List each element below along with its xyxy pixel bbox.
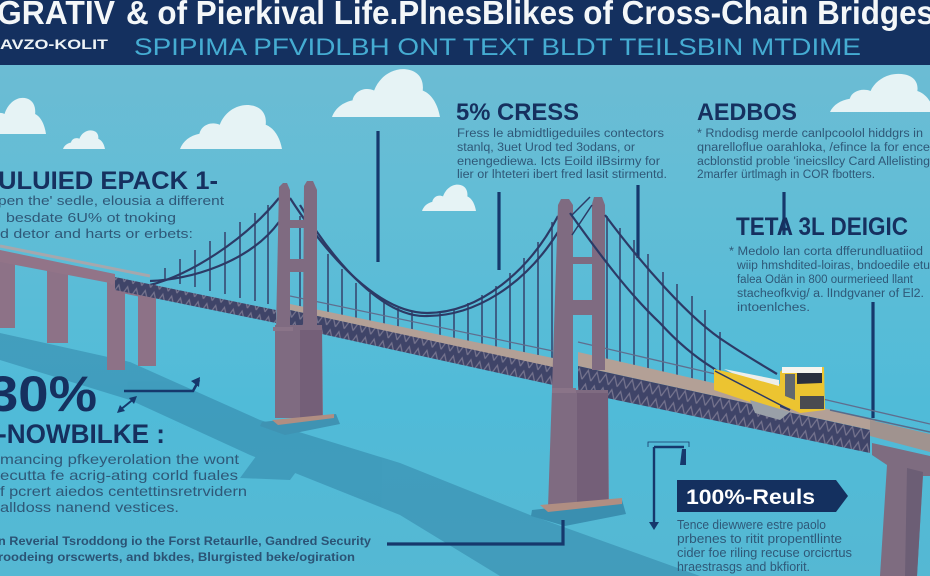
body text: Fress le abmidtligeduiles contectors [457,128,664,140]
right deck [578,342,930,453]
body text: wiip hmshdited-loiras, bndoedile etu [736,260,930,272]
body text: falea Odän in 800 ourmerieed llant [737,274,914,286]
connector to tower base [387,520,563,544]
tower 1 base [260,414,340,435]
right approach pier [830,410,930,576]
arrow to 100% panel [648,442,689,530]
heading: TETA 3L DEIGIC [736,213,908,241]
cab windows [797,373,822,384]
left approach piers [0,258,156,370]
body text [697,128,930,181]
panel: 100% [677,480,852,574]
cloud 5 [422,185,476,211]
body text [457,128,667,181]
tower 2 base [531,498,626,526]
panel: aedbos [697,99,930,181]
cloud 2 [180,105,282,149]
panel: 5% cress [456,99,667,181]
body text: acblonstid proble 'ineicsllcy Card Allelisting [697,156,930,168]
tower 1 [273,181,323,418]
subtitle: SPIPIMA PFVIDLBH ONT TEXT BLDT TEILSBIN MTDIME [134,34,861,61]
center deck [290,296,553,385]
panel: top left text [0,167,224,241]
connector lines [378,131,873,418]
cargo [714,369,780,412]
banner [677,480,848,512]
body text: cider foe riling recuse orcicrtus [677,545,852,560]
body text: pen the' sedle, elousia a different [0,193,224,208]
bottom left note [0,534,371,564]
cloud 6 [830,74,930,112]
body text: besdate 6U% ot tnoking [6,210,176,225]
body text: stacheofkvig/ a. lIndgvaner of El2. [737,288,924,300]
body text: intoenlches. [737,302,810,314]
body text: enengediewa. Icts Eoild ilBsirmy for [457,156,660,168]
cab [780,367,825,413]
body text: 2marfer ürtlmagh in COR fbotters. [697,169,875,181]
body text: mancing pfkeyerolation the wont [0,451,239,467]
heading: ULUIED EPACK 1- [0,167,218,195]
tower 2 [548,197,609,508]
cloud 4 [63,130,105,149]
left truss [115,277,276,323]
heading: AEDBOS [697,99,797,126]
body text [0,451,247,515]
arrows near 30% [117,377,200,413]
header small label: AVZO-KOLIT [0,36,109,52]
banner label: 100%-Reuls [686,486,815,509]
bottom left note: n Reverial Tsroddong io the Forst Retaurlle, Gandred Security [0,534,371,548]
body text [729,246,930,314]
heading: -NOWBILKE : [0,419,165,449]
bridge shadow on water [0,333,700,576]
grille [800,396,824,409]
body text: alldoss nanend vestices. [0,499,179,515]
body text: ecutta fe acrig-ating corld fuales [0,467,238,483]
body text: d detor and harts or erbets: [0,226,193,241]
body text: f pcrert aiedos centettinsretrvidern [0,483,247,499]
body text [0,193,224,241]
panel: teta deigic [729,213,930,314]
bottom left note: roodeing orscwerts, and bkdes, Blurgisted beke/ogiration [0,550,355,564]
cloud 3 [0,98,46,134]
left approach deck [0,246,156,300]
header banner [0,0,930,65]
body text: stanlq, 3uet Urod ted 3odans, or [457,142,635,154]
panel: 30% stat [0,366,247,515]
body text: prbenes to ritit propentllinte [677,531,842,546]
body text: hraestrasgs and bkfiorit. [677,559,810,574]
bridge main cables and hangers, back layer [150,198,720,396]
heading: 5% CRESS [456,99,579,126]
body text: lier or lhteteri ibert fred lasit stirmentd. [457,169,667,181]
body text: * Medolo lan corta dfferundluatiiod [729,246,923,258]
body text: qnarelloflue oarahloka, /efince la for ence [697,142,930,154]
truck [714,367,825,420]
body text [677,517,852,574]
chassis [750,400,790,420]
body text: * Rndodisg merde canlpcoolol hiddgrs in [697,128,923,140]
cloud 1 [332,69,440,117]
right span cables [570,197,790,410]
body text: Tence diewwere estre paolo [677,517,826,532]
